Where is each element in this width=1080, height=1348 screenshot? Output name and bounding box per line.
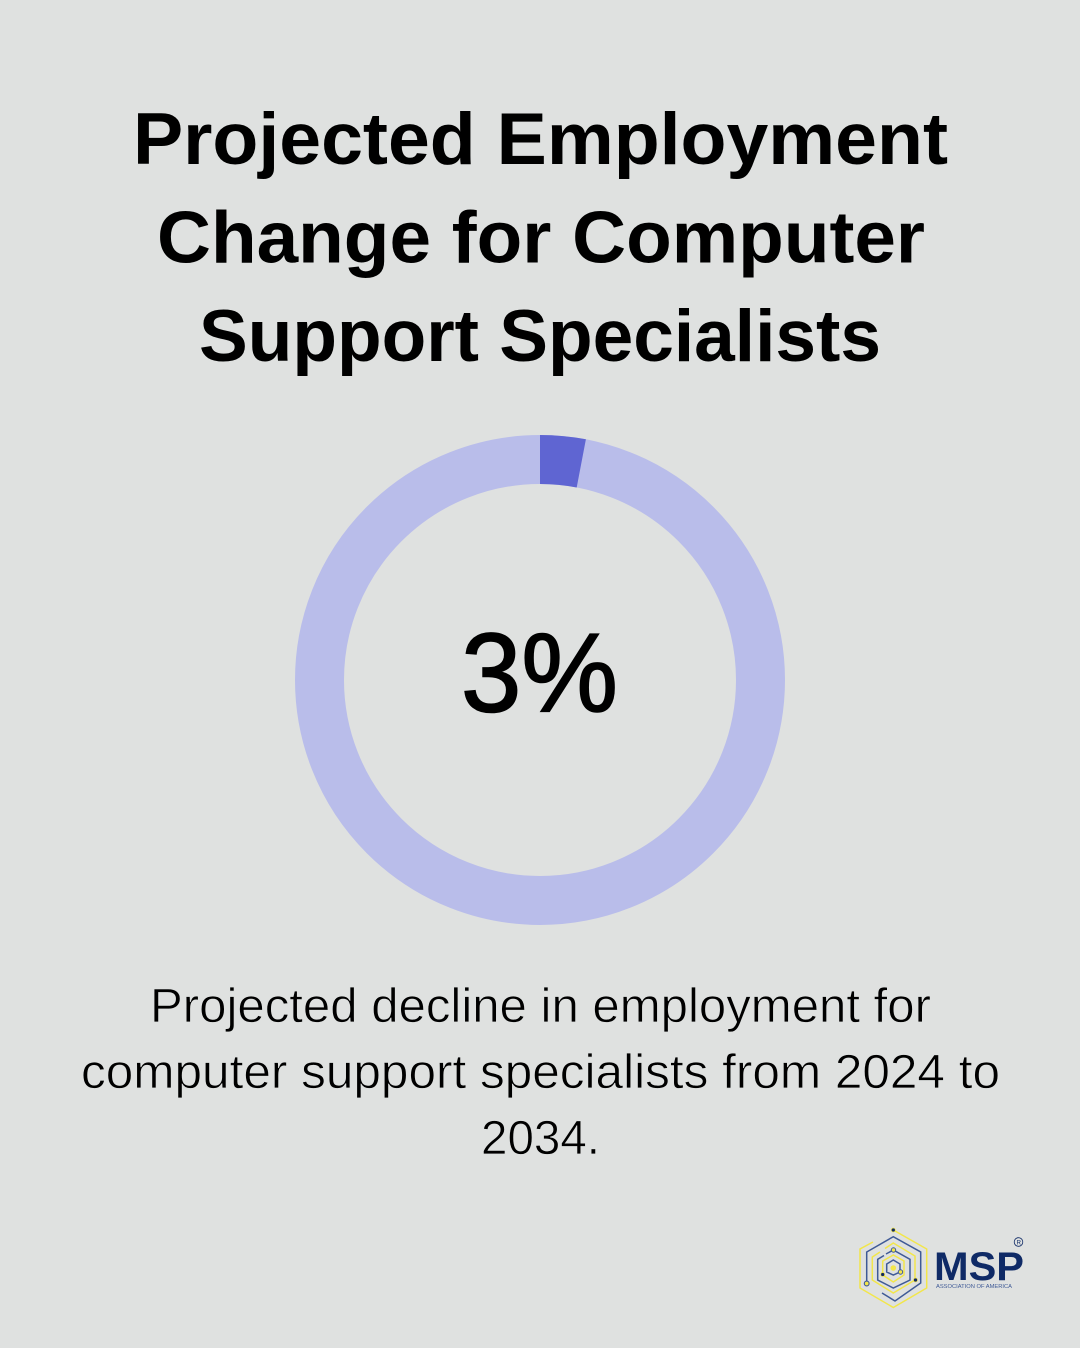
donut center value: 3% [461, 610, 618, 736]
logo tagline: ASSOCIATION OF AMERICA [936, 1284, 1012, 1290]
description text: 2034. [481, 1112, 600, 1165]
title: Support Specialists [199, 296, 881, 377]
title: Change for Computer [157, 198, 925, 278]
logo: MSP Association of America [860, 1228, 1024, 1308]
logo wordmark: MSP [934, 1245, 1024, 1289]
title [133, 99, 948, 377]
donut chart: 3% [320, 435, 760, 900]
description text: Projected decline in employment for [150, 980, 931, 1033]
logo registered mark: R [1017, 1240, 1022, 1246]
description text [81, 980, 1000, 1165]
title: Projected Employment [133, 99, 948, 180]
logo registered mark [1014, 1238, 1023, 1246]
icon: circuit hexagon [860, 1228, 927, 1308]
donut highlighted slice [540, 435, 586, 488]
description text: computer support specialists from 2024 to [81, 1046, 1000, 1099]
donut track [320, 460, 760, 900]
